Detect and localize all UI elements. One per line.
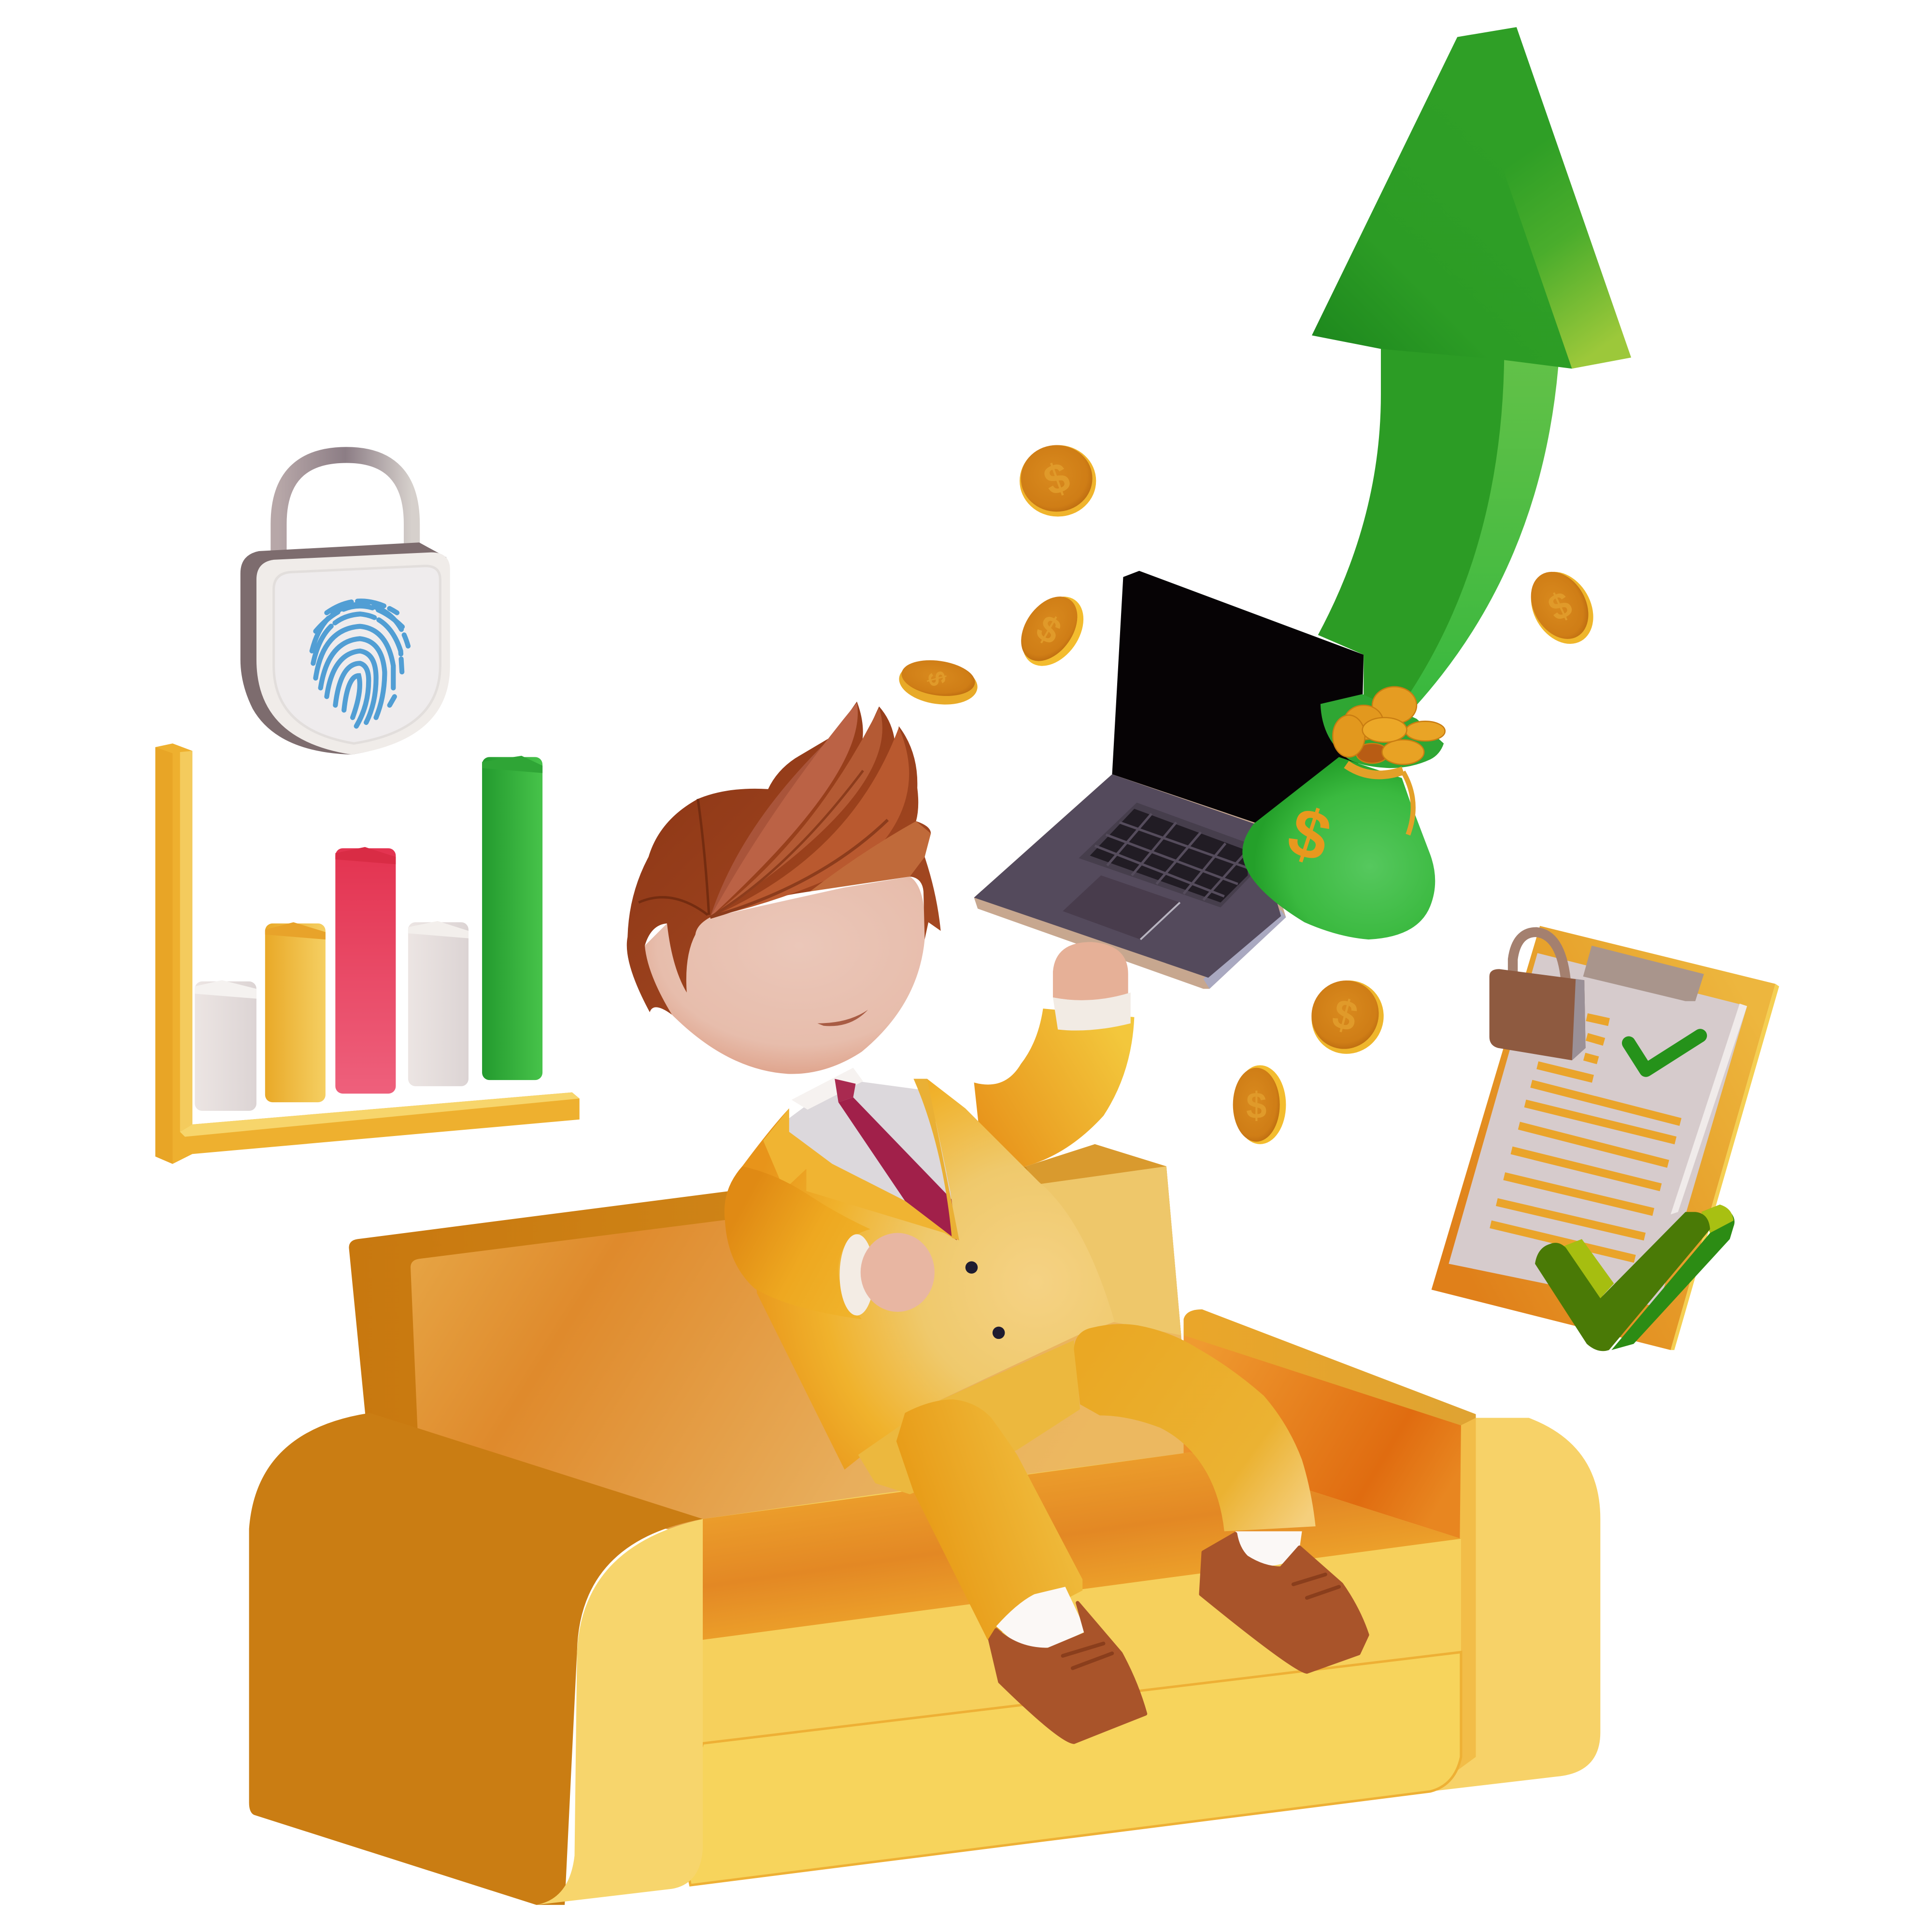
coin 6 xyxy=(1233,1065,1286,1144)
character: businessman xyxy=(627,701,1367,1742)
jacket lapel xyxy=(763,1108,957,1240)
sofa: left arm xyxy=(249,1413,703,1905)
far leg xyxy=(1074,1324,1316,1566)
bar: red xyxy=(335,847,396,1094)
sofa: seat cushion xyxy=(703,1452,1461,1746)
coin 3 xyxy=(896,656,980,710)
laptop base xyxy=(974,774,1286,989)
icon: padlock with fingerprint xyxy=(241,455,450,754)
resting hand xyxy=(839,1233,935,1316)
coin 4 xyxy=(1519,561,1606,655)
dollar sign on bag: $ xyxy=(1279,792,1339,877)
bar: white 1 xyxy=(195,980,256,1111)
arrow shaft xyxy=(1318,333,1559,707)
large green check xyxy=(1535,1205,1734,1351)
coin 1 xyxy=(1020,445,1096,517)
coins: floating dollar coins xyxy=(896,445,1606,1144)
sofa: base front xyxy=(678,1652,1461,1885)
bar: gold xyxy=(265,922,326,1102)
small green check xyxy=(1629,1036,1700,1070)
left arm sleeve xyxy=(724,1166,870,1319)
icon: money bag xyxy=(1242,687,1445,939)
checklist lines xyxy=(1491,1017,1680,1259)
jacket buttons xyxy=(966,1261,1005,1339)
icon: fingerprint xyxy=(312,601,408,726)
head xyxy=(627,701,941,1074)
sofa: right arm xyxy=(1184,1309,1600,1791)
far shoe xyxy=(1201,1534,1367,1672)
icon: clipboard with checklist xyxy=(1432,926,1779,1351)
face xyxy=(645,877,925,1074)
coin 5: $ xyxy=(1328,990,1363,1041)
bar: white 2 xyxy=(408,921,469,1086)
jacket xyxy=(724,1079,1115,1470)
icon: laptop xyxy=(974,571,1364,989)
coin 4: $ xyxy=(1542,583,1578,629)
raised arm and hand xyxy=(974,942,1134,1196)
trousers pelvis xyxy=(858,1340,1080,1494)
coin 1: $ xyxy=(1038,453,1076,505)
near shoe xyxy=(990,1603,1145,1742)
arrow: rising green growth arrow xyxy=(1312,27,1631,707)
sofa xyxy=(249,1144,1600,1905)
coin 6: $ xyxy=(1246,1085,1266,1126)
coin 5 xyxy=(1298,967,1397,1067)
shirt and tie xyxy=(789,1068,957,1240)
coin 3: $ xyxy=(922,668,952,689)
hair xyxy=(627,701,941,1015)
bar: green xyxy=(482,756,542,1080)
chart: bar chart with golden axes xyxy=(156,743,580,1164)
coins in bag xyxy=(1333,687,1445,765)
arrow head xyxy=(1312,27,1631,369)
hair strands xyxy=(710,740,828,917)
small padlock xyxy=(1490,932,1586,1060)
sofa: backrest xyxy=(349,1144,1190,1541)
mouth xyxy=(817,1010,868,1026)
clipboard clip xyxy=(1583,946,1704,1001)
near leg xyxy=(896,1399,1086,1648)
laptop screen xyxy=(1112,571,1364,824)
coin 2 xyxy=(1009,585,1096,678)
coin 2: $ xyxy=(1029,607,1068,653)
